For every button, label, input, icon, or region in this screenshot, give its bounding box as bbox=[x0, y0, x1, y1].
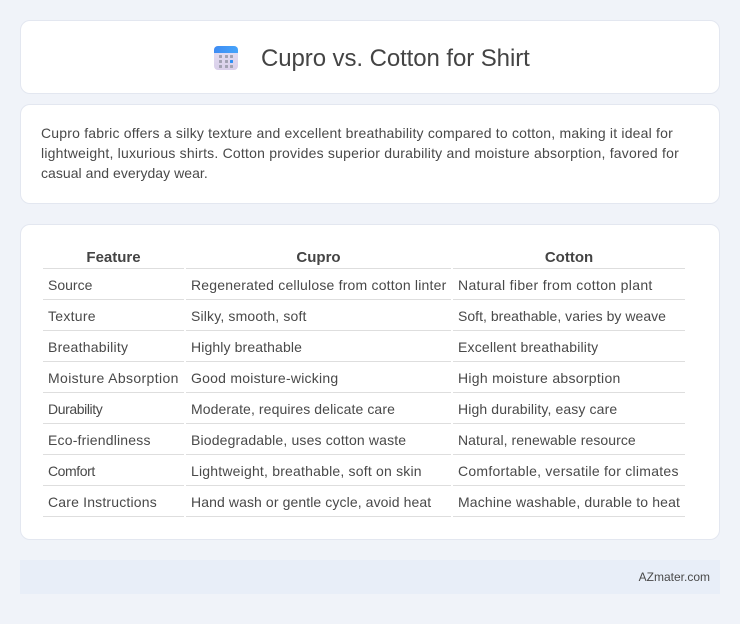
row: Care Instructions bbox=[48, 494, 680, 510]
row: Eco-friendliness bbox=[48, 432, 636, 448]
icon: calendar bbox=[214, 46, 238, 70]
row: Texture: Silky, smooth, soft bbox=[191, 308, 307, 324]
header: Cotton: Cotton bbox=[545, 249, 593, 266]
row: Comfort: Comfort bbox=[48, 463, 95, 479]
row: Moisture Absorption: High moisture absorption bbox=[458, 370, 621, 386]
row: Durability: Durability bbox=[48, 401, 102, 417]
row: Source bbox=[48, 277, 653, 293]
row: Eco-friendliness: Eco-friendliness bbox=[48, 432, 151, 448]
row: Texture: Soft, breathable, varies by weave bbox=[458, 308, 666, 324]
row: Care Instructions: Care Instructions bbox=[48, 494, 157, 510]
description text: Cupro fabric offers a silky texture and excellent breathability compared to cotton, making it ideal for bbox=[41, 125, 673, 141]
row: Texture bbox=[48, 308, 666, 324]
row: Texture: Texture bbox=[48, 308, 96, 324]
row: Breathability bbox=[48, 339, 598, 355]
header: Cupro: Cupro bbox=[296, 249, 341, 266]
description text: lightweight, luxurious shirts. Cotton provides superior durability and moisture absorption, favored for bbox=[41, 145, 679, 161]
row: Moisture Absorption bbox=[48, 370, 621, 386]
description panel bbox=[20, 104, 720, 204]
footer bar bbox=[20, 560, 720, 594]
row: Eco-friendliness: Natural, renewable resource bbox=[458, 432, 636, 448]
title: Cupro vs. Cotton for Shirt bbox=[261, 45, 530, 72]
row: Breathability: Breathability bbox=[48, 339, 128, 355]
row: Comfort bbox=[48, 463, 679, 479]
row: Durability: Moderate, requires delicate care bbox=[191, 401, 395, 417]
row: Comfort: Comfortable, versatile for climates bbox=[458, 463, 679, 479]
description text: casual and everyday wear. bbox=[41, 165, 208, 181]
row: Durability: High durability, easy care bbox=[458, 401, 617, 417]
row: Comfort: Lightweight, breathable, soft on skin bbox=[191, 463, 422, 479]
header: Feature: Feature bbox=[86, 249, 141, 266]
row: Durability bbox=[48, 401, 617, 417]
row: Breathability: Excellent breathability bbox=[458, 339, 598, 355]
row: Care Instructions: Machine washable, durable to heat bbox=[458, 494, 680, 510]
row: Source: Source bbox=[48, 277, 92, 293]
footer credit: AZmater.com bbox=[639, 570, 710, 584]
title panel bbox=[20, 20, 720, 94]
row: Care Instructions: Hand wash or gentle cycle, avoid heat bbox=[191, 494, 431, 510]
row: Source: Regenerated cellulose from cotton linter bbox=[191, 277, 446, 293]
row: Moisture Absorption: Good moisture-wicking bbox=[191, 370, 338, 386]
row: Moisture Absorption: Moisture Absorption bbox=[48, 370, 179, 386]
row: Source: Natural fiber from cotton plant bbox=[458, 277, 653, 293]
description text bbox=[41, 125, 679, 181]
comparison table panel bbox=[20, 224, 720, 540]
row: Eco-friendliness: Biodegradable, uses cotton waste bbox=[191, 432, 406, 448]
row: Breathability: Highly breathable bbox=[191, 339, 302, 355]
